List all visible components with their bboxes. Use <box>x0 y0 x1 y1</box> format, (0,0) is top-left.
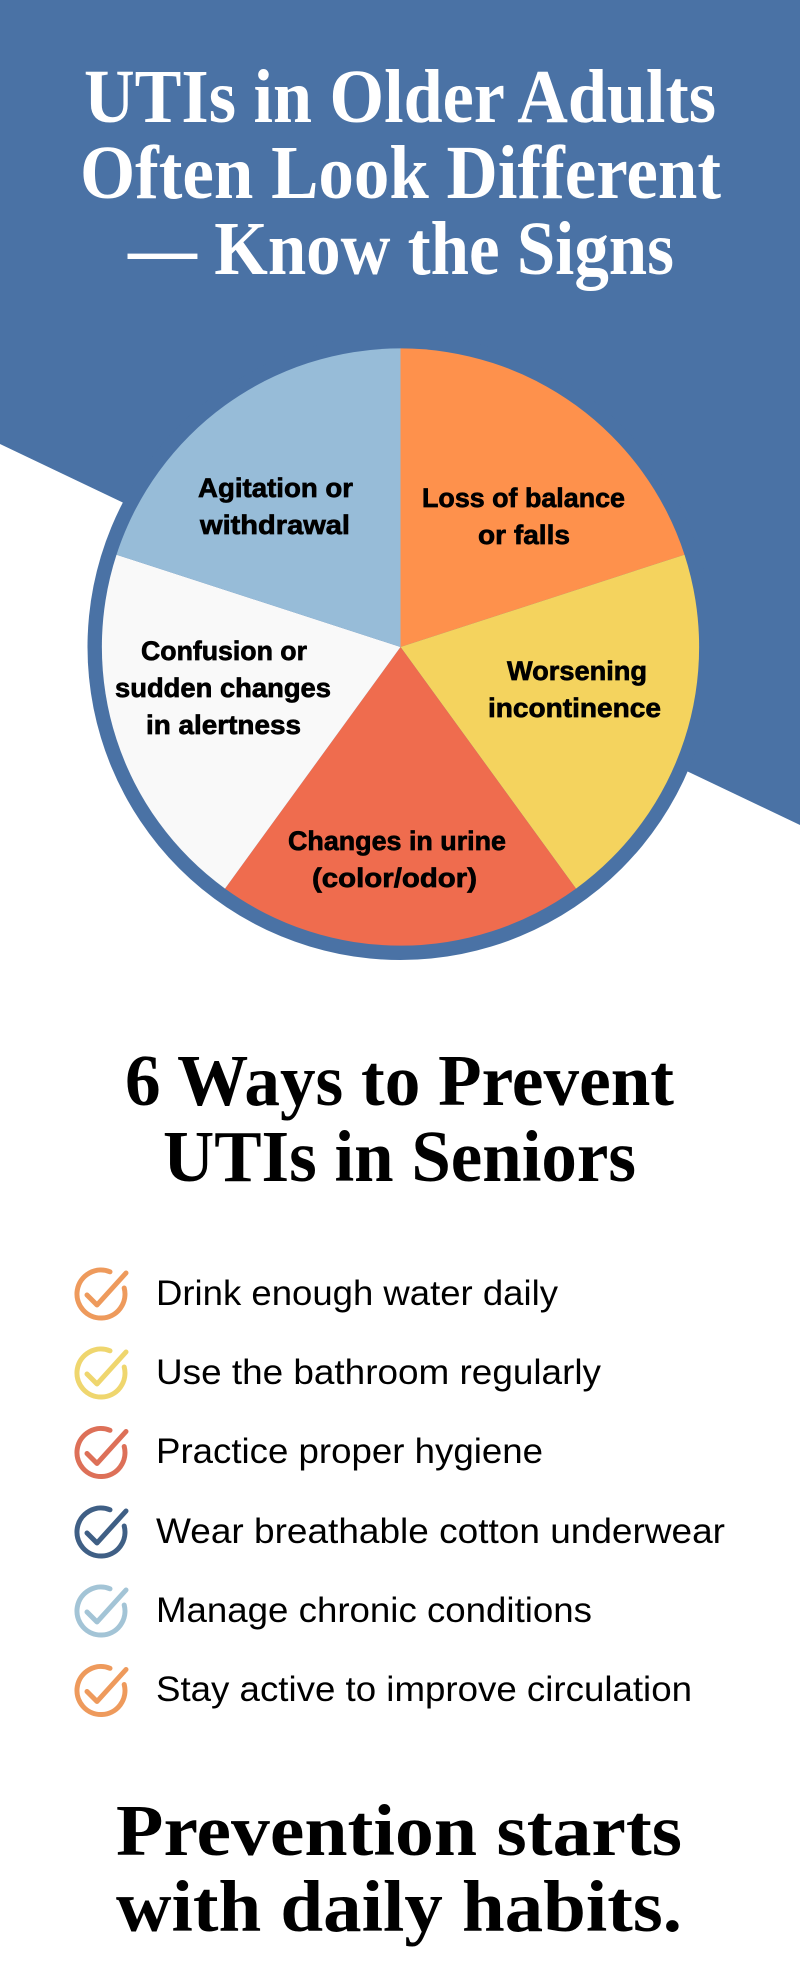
heading: 6 ways to prevent <box>125 1040 674 1197</box>
wedge: loss of balance: Loss of balance <box>422 483 625 513</box>
wedge: worsening incontinence: Worsening <box>507 656 647 686</box>
item: drink water <box>77 1270 559 1318</box>
wedge: changes in urine: Changes in urine <box>288 826 506 856</box>
item: hygiene: Practice proper hygiene <box>156 1432 543 1471</box>
title: UTIs in Older Adults <box>84 55 716 139</box>
heading: 6 ways to prevent: UTIs in Seniors <box>163 1116 636 1197</box>
wedge: changes in urine <box>225 647 576 946</box>
item: use bathroom <box>77 1349 602 1397</box>
item: stay active: Stay active to improve circulation <box>156 1670 692 1709</box>
blue angled header background <box>0 0 800 825</box>
closing message <box>116 1790 682 1947</box>
pie chart: warning signs <box>88 334 714 960</box>
item: chronic conditions: Manage chronic conditions <box>156 1591 592 1630</box>
item: use bathroom: Use the bathroom regularly <box>156 1353 602 1392</box>
wedge: worsening incontinence <box>400 555 699 889</box>
title: — Know the Signs <box>127 207 674 291</box>
item: drink water: Drink enough water daily <box>156 1274 559 1313</box>
wedge: confusion: Confusion or <box>141 636 307 666</box>
title <box>80 55 721 291</box>
title: Often Look Different <box>80 131 721 215</box>
item: cotton underwear <box>77 1508 725 1556</box>
item: hygiene <box>77 1429 543 1477</box>
item: chronic conditions <box>77 1587 592 1635</box>
wedge: worsening incontinence: incontinence <box>488 693 661 723</box>
wedge: changes in urine: (color/odor) <box>312 863 477 893</box>
wedge: loss of balance: or falls <box>478 520 570 550</box>
wedge: loss of balance <box>400 348 684 647</box>
item: cotton underwear: Wear breathable cotton underwear <box>156 1512 725 1551</box>
closing message: with daily habits. <box>116 1866 682 1947</box>
closing message: Prevention starts <box>116 1790 682 1871</box>
wedge: agitation <box>116 348 400 647</box>
wedge: confusion <box>102 555 400 889</box>
heading: 6 ways to prevent: 6 Ways to Prevent <box>125 1040 674 1121</box>
wedge: confusion: sudden changes <box>115 673 331 703</box>
wedge: agitation: withdrawal <box>199 510 350 540</box>
wedge: agitation: Agitation or <box>198 473 353 503</box>
wedge: confusion: in alertness <box>146 710 301 740</box>
item: stay active <box>77 1667 692 1715</box>
checklist: prevention tips <box>77 1270 725 1715</box>
